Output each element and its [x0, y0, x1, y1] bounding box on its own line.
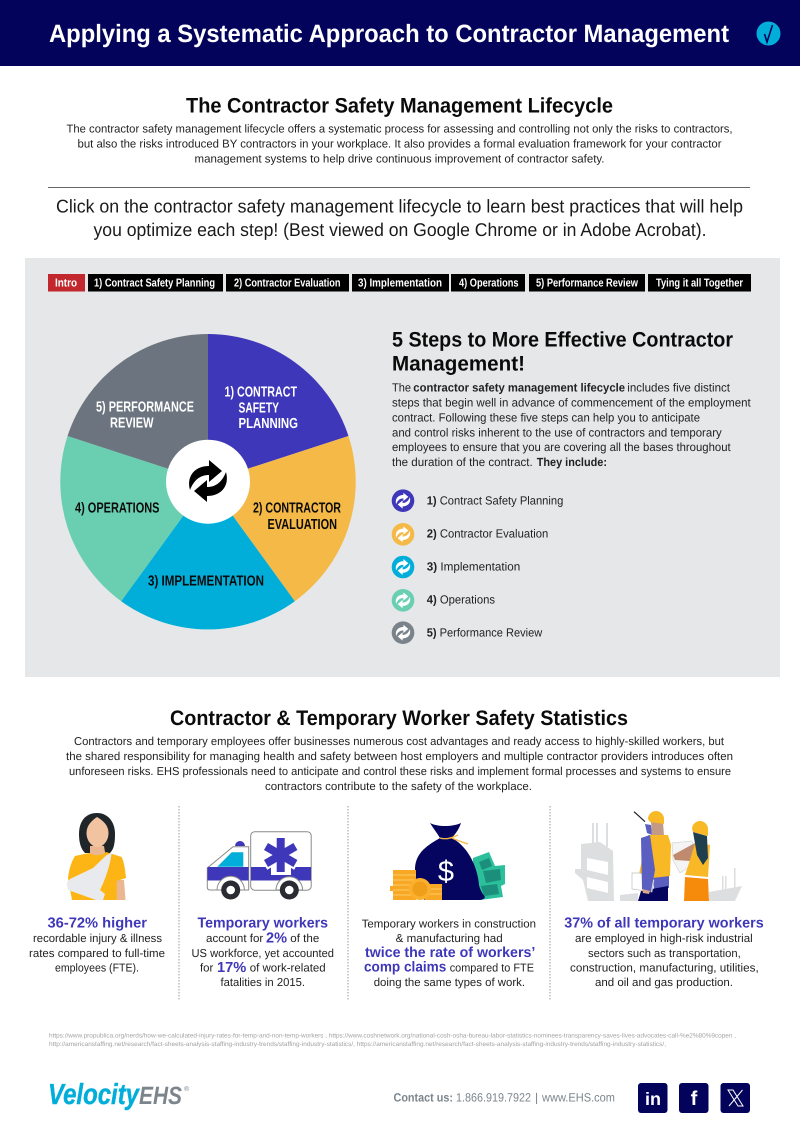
icon: money bag with coins and cash: $ [438, 856, 454, 888]
stat text: temporary workers: 2% [266, 930, 287, 946]
icon: money bag with coins and cash [390, 823, 505, 900]
lifecycle intro paragraph: but also the risks introduced BY contractors in your workplace. It also provides a formal evaluation framework for your contractor [78, 139, 722, 151]
stat text: 37% of all temporary workers: 37% of all temporary workers [564, 916, 764, 932]
stat text: temporary workers: of work-related [250, 962, 326, 974]
step 2 item [392, 523, 548, 546]
stat text: 36-72% higher: rates compared to full-time [29, 948, 165, 960]
stat column: workers comp claims [362, 823, 536, 989]
icon: construction workers [575, 811, 742, 901]
slice: performance review [68, 334, 208, 482]
steps description: and control risks inherent to the use of contractors and temporary [392, 425, 722, 439]
slice: contract safety planning [208, 334, 348, 482]
social icon: Facebook [679, 1083, 708, 1113]
navigation tabs: 3) Implementation [358, 278, 442, 290]
panel: lifecycle interactive [25, 258, 780, 677]
source references: https://www.propublica.org/nerds/how-we-calculated-injury-rates-for-temp-and-non-temp-workers , https://www.coshnetwork.org/national-cosh-osha-bureau-labor-statistics-nominees-transparency-saves-lives-advocates-call-%e2%80%9copen , [49, 1033, 736, 1040]
navigation tabs: Tying it all Together [656, 278, 743, 290]
icon: injured worker with sling [67, 813, 126, 900]
navigation tabs: 5) Performance Review [536, 278, 638, 290]
social icon: LinkedIn: in [645, 1089, 661, 1109]
navigation tabs: 4) Operations [459, 278, 518, 290]
step list [392, 489, 563, 644]
stat text: 36-72% higher [29, 916, 165, 974]
section heading: statistics: Contractor & Temporary Worker Safety Statistics [170, 707, 628, 730]
navigation tabs: Intro [55, 278, 77, 290]
steps heading: Management! [392, 353, 525, 376]
step 3 item [392, 556, 520, 578]
main title: Applying a Systematic Approach to Contractor Management [49, 20, 730, 48]
section heading: lifecycle: The Contractor Safety Management Lifecycle [186, 95, 613, 118]
social icon: X [720, 1083, 750, 1113]
stat text: temporary workers: US workforce, yet accounted [192, 948, 334, 960]
lifecycle intro paragraph: management systems to help drive continuous improvement of contractor safety. [194, 154, 604, 166]
stat text: temporary workers: fatalities in 2015. [220, 977, 305, 989]
steps heading [392, 329, 733, 376]
slice: performance review: 5) PERFORMANCE [96, 400, 194, 416]
stat text: 37% of all temporary workers: are employed in high-risk industrial [575, 933, 753, 945]
steps description: includes five distinct [627, 381, 731, 395]
stat text: twice the rate: compared to FTE [450, 962, 534, 974]
step 1 item: 1) Contract Safety Planning [427, 493, 563, 507]
slice: contract safety planning: PLANNING [238, 416, 298, 432]
contact line: Contact us: [394, 1091, 453, 1105]
contact line [394, 1091, 615, 1105]
statistics intro paragraph: unforeseen risks. EHS professionals need to anticipate and control these risks and implement formal processes and systems to ensure [69, 766, 731, 778]
contact line: | [535, 1091, 538, 1105]
stat text: 37% of all temporary workers: sectors such as transportation, [588, 948, 741, 960]
slice: contract safety planning: SAFETY [238, 400, 279, 416]
slice: operations [60, 436, 208, 601]
navigation tabs: 1) Contract Safety Planning [94, 278, 215, 290]
steps description: steps that begin well in advance of commencement of the employment [392, 396, 751, 410]
slice: contractor evaluation: EVALUATION [268, 517, 337, 533]
stat text: temporary workers: account for [206, 933, 263, 945]
stat text: 37% of all temporary workers: and oil and gas production. [595, 977, 733, 989]
icon: ambulance [207, 832, 311, 900]
contact line: 1.866.919.7922 [456, 1091, 531, 1105]
step 4 item [392, 589, 495, 612]
steps description [392, 381, 751, 469]
social icon: LinkedIn [638, 1083, 668, 1113]
lifecycle pie chart [60, 334, 356, 629]
VelocityEHS logo: EHS [139, 1082, 182, 1110]
step 2 item: 2) Contractor Evaluation [427, 526, 548, 540]
step 1 item [392, 489, 563, 512]
stat text: 36-72% higher: employees (FTE). [55, 962, 139, 974]
stat column: high-risk sectors [564, 811, 764, 989]
slice: contract safety planning: 1) CONTRACT [224, 385, 297, 401]
click instruction text [56, 196, 743, 240]
stat text: 37% of all temporary workers [564, 916, 764, 989]
source references: http://americanstaffing.net/research/fact-sheets-analysis-staffing-industry-trends/staffing-industry-statistics/, https://americanstaffing.net/research/fact-sheets-analysis-staffing-industry-trends/staffing-industry-statistics/, [49, 1041, 666, 1048]
stat text: temporary workers [192, 916, 334, 989]
steps description: They include: [537, 455, 607, 469]
stat column: temporary workers fatalities [192, 832, 334, 989]
stat text: 36-72% higher: recordable injury & illness [33, 933, 162, 945]
header banner [0, 0, 800, 66]
VelocityEHS logo: ® [184, 1086, 190, 1093]
slice: implementation [121, 482, 295, 629]
statistics intro paragraph: the shared responsibility for managing health and safety between host employers and multiple contractor providers introduces often [66, 751, 733, 763]
lifecycle intro paragraph [66, 124, 732, 166]
steps description: the duration of the contract. [392, 455, 533, 469]
steps description: employees to ensure that you are covering all the bases throughout [392, 440, 731, 454]
stat text: twice the rate: twice the rate of workers’ [365, 945, 535, 961]
steps description: The [392, 381, 411, 395]
stat column: injury rates [29, 813, 165, 974]
lifecycle intro paragraph: The contractor safety management lifecycle offers a systematic process for assessing and controlling not only the risks to contractors, [66, 124, 732, 136]
stat text: twice the rate: comp claims [364, 960, 446, 976]
steps description: contractor safety management lifecycle [413, 381, 625, 395]
step 5 item [392, 621, 543, 644]
source references [49, 1033, 736, 1048]
statistics intro paragraph: Contractors and temporary employees offer businesses numerous cost advantages and ready access to highly-skilled workers, but [74, 736, 725, 748]
center hub with refresh icon [166, 440, 250, 524]
steps description: contract. Following these five steps can help you to anticipate [392, 411, 700, 425]
navigation tabs: 2) Contractor Evaluation [234, 278, 340, 290]
stat text: 37% of all temporary workers: construction, manufacturing, utilities, [570, 962, 759, 974]
stat text: temporary workers: for [200, 962, 213, 974]
stat text: twice the rate [362, 919, 536, 989]
slice: contractor evaluation: 2) CONTRACTOR [253, 501, 341, 517]
click instruction text: Click on the contractor safety management lifecycle to learn best practices that will help [56, 196, 743, 217]
stat text: twice the rate: Temporary workers in construction [362, 919, 536, 931]
stat text: temporary workers: 17% [217, 960, 246, 976]
stat text: twice the rate: doing the same types of work. [374, 977, 525, 989]
stat text: 36-72% higher: 36-72% higher [48, 916, 147, 932]
stat text: temporary workers: of the [290, 933, 319, 945]
slice: implementation: 3) IMPLEMENTATION [148, 574, 264, 590]
steps heading: 5 Steps to More Effective Contractor [392, 329, 733, 352]
navigation tabs [48, 274, 751, 292]
statistics intro paragraph: contractors contribute to the safety of the workplace. [265, 781, 532, 793]
contact line: www.EHS.com [541, 1091, 615, 1105]
icon: check badge [756, 22, 780, 46]
slice: contractor evaluation [208, 436, 356, 601]
VelocityEHS logo: Velocity [48, 1079, 141, 1111]
step 5 item: 5) Performance Review [427, 625, 543, 639]
step 3 item: 3) Implementation [427, 560, 520, 574]
slice: performance review: REVIEW [110, 416, 154, 432]
social icon: Facebook: f [691, 1088, 698, 1110]
statistics intro paragraph [66, 736, 733, 793]
step 4 item: 4) Operations [427, 593, 495, 607]
stat text: twice the rate: & manufacturing had [396, 933, 503, 945]
stat text: temporary workers: Temporary workers [198, 916, 328, 932]
slice: operations: 4) OPERATIONS [75, 501, 160, 517]
click instruction text: you optimize each step! (Best viewed on Google Chrome or in Adobe Acrobat). [94, 219, 706, 240]
